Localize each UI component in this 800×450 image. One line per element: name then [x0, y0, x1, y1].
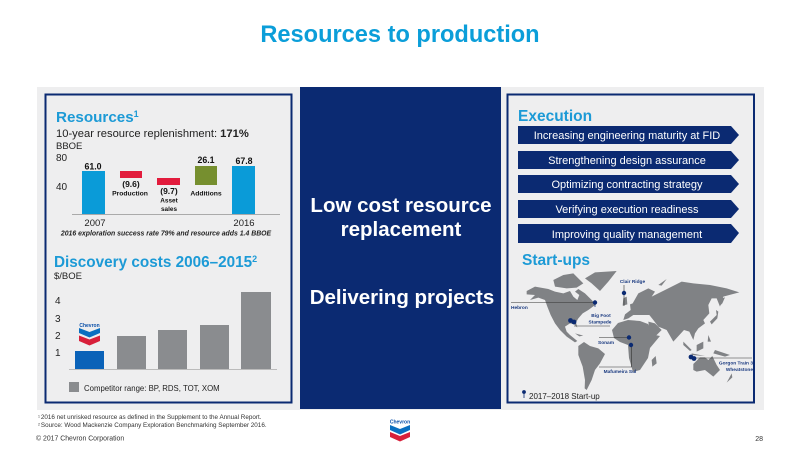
arrow: improving quality management: Improving quality management [552, 229, 702, 241]
heading: low cost resource replacement: replacement [341, 218, 462, 241]
panel: execution and start-ups [508, 94, 754, 402]
footnotes [38, 414, 267, 429]
heading: start-ups: Start-ups [522, 252, 590, 269]
footnotes: 1 [38, 414, 41, 418]
land: Africa [612, 320, 660, 372]
heading: resources: Resources [56, 109, 134, 126]
bar: production: (9.6) [122, 179, 140, 189]
title: Resources to production [260, 22, 540, 48]
panel: center message [300, 87, 501, 409]
footnotes: 2016 net unrisked resource as defined in the Supplement to the Annual Report. [41, 414, 262, 421]
bar: 2007: 61.0 [84, 162, 102, 172]
arrow: optimizing contracting strategy [518, 175, 739, 193]
label: Clair Ridge: Clair Ridge [620, 279, 645, 285]
heading: low cost resource replacement: Low cost resource [310, 194, 492, 217]
text: unit $/BOE: $/BOE [54, 271, 82, 282]
label: Big Foot Stampede: Big Foot [591, 313, 611, 319]
bar: additions: 26.1 [197, 155, 215, 165]
label: Mafumeira Sul [599, 343, 636, 375]
heading: discovery costs: Discovery costs 2006–2015 [54, 254, 252, 271]
arrow: verifying execution readiness [518, 200, 739, 218]
label: Hebron: Hebron [511, 305, 528, 311]
label: Gorgon and Wheatstone: Gorgon Train 3 [719, 360, 753, 366]
bar: additions [190, 155, 222, 198]
label: Gorgon and Wheatstone [689, 355, 753, 373]
arrow: optimizing contracting strategy: Optimizing contracting strategy [551, 179, 703, 191]
bar: production: Production [112, 190, 148, 198]
bar chart: discovery costs: 4 [55, 296, 61, 307]
text: exploration note: 2016 exploration success rate 79% and resource adds 1.4 BBOE [60, 230, 272, 238]
heading: resources: 1 [134, 109, 139, 119]
arrow: strengthening design assurance [518, 151, 739, 169]
label: Mafumeira Sul: Mafumeira Sul [604, 369, 636, 375]
bar chart: discovery costs [55, 292, 277, 370]
waterfall chart: 2007 [84, 218, 106, 229]
arrow: strengthening design assurance: Strengthening design assurance [548, 155, 706, 167]
bar: asset sales [157, 178, 180, 213]
icon: Chevron footer logo [390, 420, 410, 442]
bar: asset sales: (9.7) [160, 186, 178, 196]
arrow: increasing engineering maturity: Increasing engineering maturity at FID [534, 130, 720, 142]
icon: Chevron footer logo: Chevron [390, 420, 410, 426]
heading: delivering projects: Delivering projects [310, 286, 494, 309]
bar chart: discovery costs: 1 [55, 348, 61, 359]
bar: 2007 [82, 162, 105, 214]
bar chart: discovery costs: 2 [55, 331, 61, 342]
waterfall chart: 40 [56, 182, 68, 193]
icon: Chevron logo [79, 323, 100, 346]
waterfall chart [56, 153, 280, 229]
heading: discovery costs: 2 [252, 254, 257, 264]
bar: 2016: 67.8 [235, 156, 253, 166]
bar: asset sales: sales [161, 206, 177, 213]
footer: copyright: © 2017 Chevron Corporation [36, 434, 124, 442]
label: Sonam: Sonam [598, 340, 614, 346]
bar: 2016 [232, 156, 255, 214]
bar chart: discovery costs: 3 [55, 314, 61, 325]
arrow: increasing engineering maturity [518, 126, 739, 144]
text: unit BBOE: BBOE [56, 141, 82, 152]
bar: additions: Additions [190, 190, 222, 198]
heading: execution: Execution [518, 108, 592, 125]
footnotes: 2 [38, 422, 41, 426]
world map [511, 271, 753, 390]
label: Hebron [511, 300, 597, 311]
label: Big Foot Stampede [568, 313, 612, 326]
arrow: verifying execution readiness: Verifying execution readiness [555, 204, 699, 216]
icon: Chevron logo: Chevron [79, 323, 100, 329]
bar: asset sales: Asset [160, 198, 179, 204]
label: Sonam [598, 335, 631, 346]
waterfall chart: 2016 [233, 218, 255, 229]
footer: page number: 28 [755, 436, 763, 443]
label: Big Foot Stampede: Stampede [589, 320, 612, 326]
arrow: improving quality management [518, 224, 739, 243]
footnotes: Source: Wood Mackenzie Company Exploration Benchmarking September 2016. [41, 422, 267, 429]
legend: start-up marker: 2017–2018 Start-up [529, 392, 600, 401]
legend: competitor range: Competitor range: BP, RDS, TOT, XOM [84, 384, 220, 393]
panel: resources and discovery costs [46, 94, 292, 402]
bar: production [112, 171, 148, 198]
text: replenishment: 10-year resource replenishment: 171% [56, 128, 249, 140]
waterfall chart: 80 [56, 153, 68, 164]
label: Gorgon and Wheatstone: Wheatstone [726, 367, 753, 373]
label: Clair Ridge [620, 279, 645, 306]
